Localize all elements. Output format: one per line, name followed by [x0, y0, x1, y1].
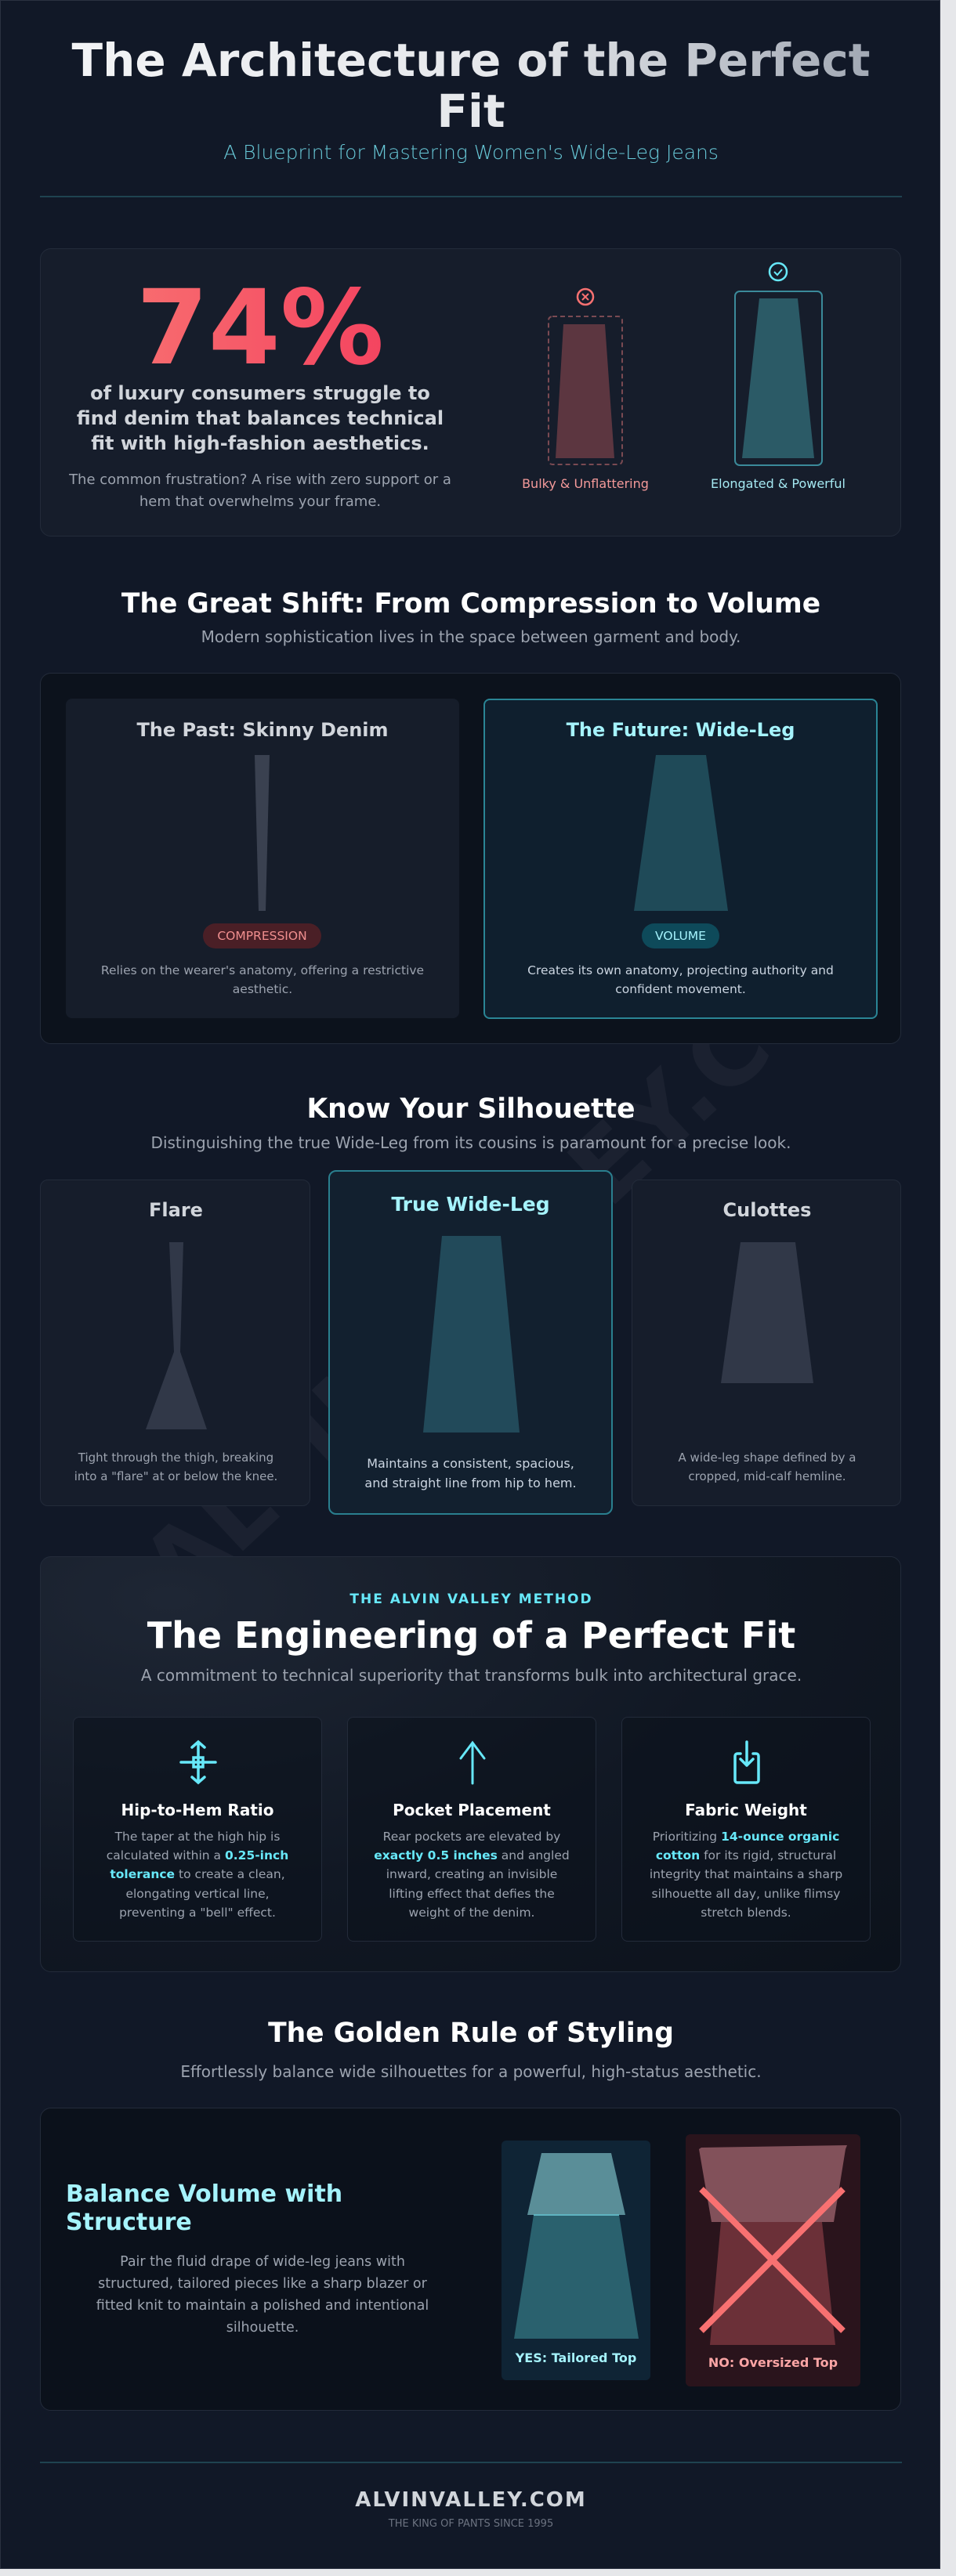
- desc: flare: [74, 1451, 277, 1483]
- label: yes: YES: Tailored Top: [516, 2350, 636, 2365]
- pill: volume: VOLUME: [655, 929, 706, 943]
- subheading: silhouette: Distinguishing the true Wide-Leg from its cousins is paramount for a precise look.: [151, 1133, 791, 1152]
- pill: compression: COMPRESSION: [217, 929, 307, 943]
- title: flare: Flare: [149, 1199, 203, 1221]
- text: fabric: integrity that maintains a sharp: [650, 1867, 842, 1881]
- title: The Architecture of the Perfect: [72, 34, 870, 87]
- card: yes tailored top: [502, 2141, 650, 2380]
- title: true wide-leg: True Wide-Leg: [391, 1193, 550, 1216]
- stat text: find denim that balances technical: [77, 407, 444, 429]
- desc: flare: into a "flare" at or below the knee.: [74, 1469, 277, 1483]
- text: pocket: Rear pockets are elevated by: [383, 1830, 560, 1844]
- text: pocket: exactly 0.5 inches and angled: [374, 1848, 570, 1862]
- shape: culottes: [721, 1242, 813, 1383]
- subheading: golden rule: Effortlessly balance wide silhouettes for a powerful, high-status aesthetic.: [180, 2062, 762, 2081]
- desc: culottes: A wide-leg shape defined by a: [679, 1451, 856, 1465]
- stat text: of luxury consumers struggle to: [90, 382, 430, 404]
- title: past: The Past: Skinny Denim: [136, 719, 389, 741]
- card: pocket: [347, 1717, 596, 1942]
- icon: ratio: [179, 1740, 217, 1784]
- stat text: fit with high-fashion aesthetics.: [91, 432, 429, 454]
- text: hip-to-hem: calculated within a 0.25-inch: [107, 1848, 288, 1862]
- desc: flare: Tight through the thigh, breaking: [78, 1451, 273, 1465]
- card: past: [66, 699, 459, 1018]
- pill: volume: [642, 923, 719, 948]
- heading: balance: Balance Volume with: [66, 2180, 342, 2208]
- desc: culottes: [679, 1451, 856, 1483]
- watermark: ALVINVALLEY.COM: [121, 867, 923, 1625]
- panel: shift: [40, 673, 901, 1044]
- text: fabric: stretch blends.: [701, 1906, 791, 1920]
- stat note: hem that overwhelms your frame.: [139, 493, 381, 510]
- desc: future: Creates its own anatomy, projecting authority and: [527, 963, 834, 977]
- title: Fit: [436, 85, 505, 138]
- text: fabric: cotton for its rigid, structural: [656, 1848, 836, 1862]
- card: hip-to-hem: [73, 1717, 322, 1942]
- icon: arrow up: [459, 1740, 486, 1784]
- desc: future: confident movement.: [615, 982, 746, 996]
- text: hip-to-hem: tolerance to create a clean,: [110, 1867, 285, 1881]
- heading: golden rule: The Golden Rule of Styling: [268, 2018, 674, 2049]
- text: hip-to-hem: preventing a "bell" effect.: [119, 1906, 276, 1920]
- stat note: The common frustration? A rise with zero support or a: [69, 471, 451, 488]
- stat number: 74%: [136, 268, 384, 388]
- shape: flare: [146, 1242, 207, 1429]
- pill: compression: [203, 923, 321, 948]
- footer tagline: THE KING OF PANTS SINCE 1995: [389, 2518, 553, 2530]
- subheading: engineering: A commitment to technical superiority that transforms bulk into architectural grace.: [141, 1666, 802, 1685]
- text: pocket: [374, 1830, 570, 1920]
- desc: past: aesthetic.: [233, 982, 292, 996]
- card: culottes: [632, 1180, 901, 1506]
- desc: true wide-leg: Maintains a consistent, spacious,: [367, 1456, 574, 1471]
- label: no: NO: Oversized Top: [708, 2355, 838, 2370]
- text: hip-to-hem: elongating vertical line,: [125, 1887, 270, 1901]
- footer brand: ALVINVALLEY.COM: [355, 2488, 587, 2512]
- text: balance: fitted knit to maintain a polished and intentional: [96, 2298, 429, 2314]
- stat note: [69, 471, 451, 510]
- desc: past: Relies on the wearer's anatomy, offering a restrictive: [101, 963, 424, 977]
- title: pocket: Pocket Placement: [393, 1801, 551, 1819]
- card: no oversized top: [686, 2134, 860, 2386]
- text: balance: silhouette.: [226, 2320, 299, 2336]
- text: fabric: silhouette all day, unlike flimsy: [652, 1887, 840, 1901]
- desc: future: [527, 963, 834, 996]
- card: flare: [40, 1180, 310, 1506]
- shape: true wide-leg: [423, 1236, 520, 1433]
- subheading: great shift: Modern sophistication lives in the space between garment and body.: [201, 627, 741, 646]
- text: balance: Pair the fluid drape of wide-leg jeans with: [120, 2254, 405, 2270]
- icon: bad fit: [548, 288, 623, 465]
- eyebrow: THE ALVIN VALLEY METHOD: [349, 1591, 593, 1607]
- shape: skinny: [255, 755, 270, 911]
- desc: culottes: cropped, mid-calf hemline.: [688, 1469, 846, 1483]
- text: pocket: lifting effect that defies the: [389, 1887, 555, 1901]
- desc: past: [101, 963, 424, 996]
- icon: good fit: [734, 262, 823, 466]
- text: balance: structured, tailored pieces like a sharp blazer or: [98, 2276, 427, 2292]
- panel: styling: [40, 2108, 901, 2411]
- illustration: oversized: [699, 2145, 847, 2345]
- text: pocket: inward, creating an invisible: [386, 1867, 557, 1881]
- text: fabric: [650, 1830, 842, 1920]
- subtitle: A Blueprint for Mastering Women's Wide-Leg Jeans: [223, 141, 719, 164]
- icon: weight: [733, 1740, 760, 1784]
- label: elongated: Elongated & Powerful: [711, 476, 846, 491]
- illustration: tailored: [514, 2153, 639, 2339]
- card: future: [483, 699, 878, 1019]
- text: fabric: Prioritizing 14-ounce organic: [653, 1830, 839, 1844]
- heading: balance: [66, 2180, 342, 2236]
- heading: engineering: The Engineering of a Perfect Fit: [147, 1614, 795, 1657]
- title: culottes: Culottes: [723, 1199, 811, 1221]
- heading: silhouette: Know Your Silhouette: [306, 1093, 636, 1125]
- panel: engineering: [40, 1556, 901, 1972]
- text: balance: [96, 2254, 429, 2336]
- desc: true wide-leg: [364, 1456, 577, 1490]
- card: true wide-leg: [328, 1170, 613, 1515]
- panel: statistic: [40, 248, 901, 537]
- title: fabric: Fabric Weight: [685, 1801, 807, 1819]
- card: fabric: [621, 1717, 871, 1942]
- text: hip-to-hem: [107, 1830, 288, 1920]
- title: [40, 35, 902, 137]
- shape: wide: [634, 755, 728, 911]
- heading: balance: Structure: [66, 2209, 192, 2236]
- text: pocket: weight of the denim.: [409, 1906, 534, 1920]
- label: bulky: Bulky & Unflattering: [522, 476, 649, 491]
- desc: true wide-leg: and straight line from hip to hem.: [364, 1476, 577, 1490]
- title: future: The Future: Wide-Leg: [567, 719, 795, 741]
- title: hip-to-hem: Hip-to-Hem Ratio: [121, 1801, 273, 1819]
- text: hip-to-hem: The taper at the high hip is: [115, 1830, 280, 1844]
- heading: great shift: The Great Shift: From Compression to Volume: [121, 588, 820, 620]
- stat text: [77, 382, 444, 454]
